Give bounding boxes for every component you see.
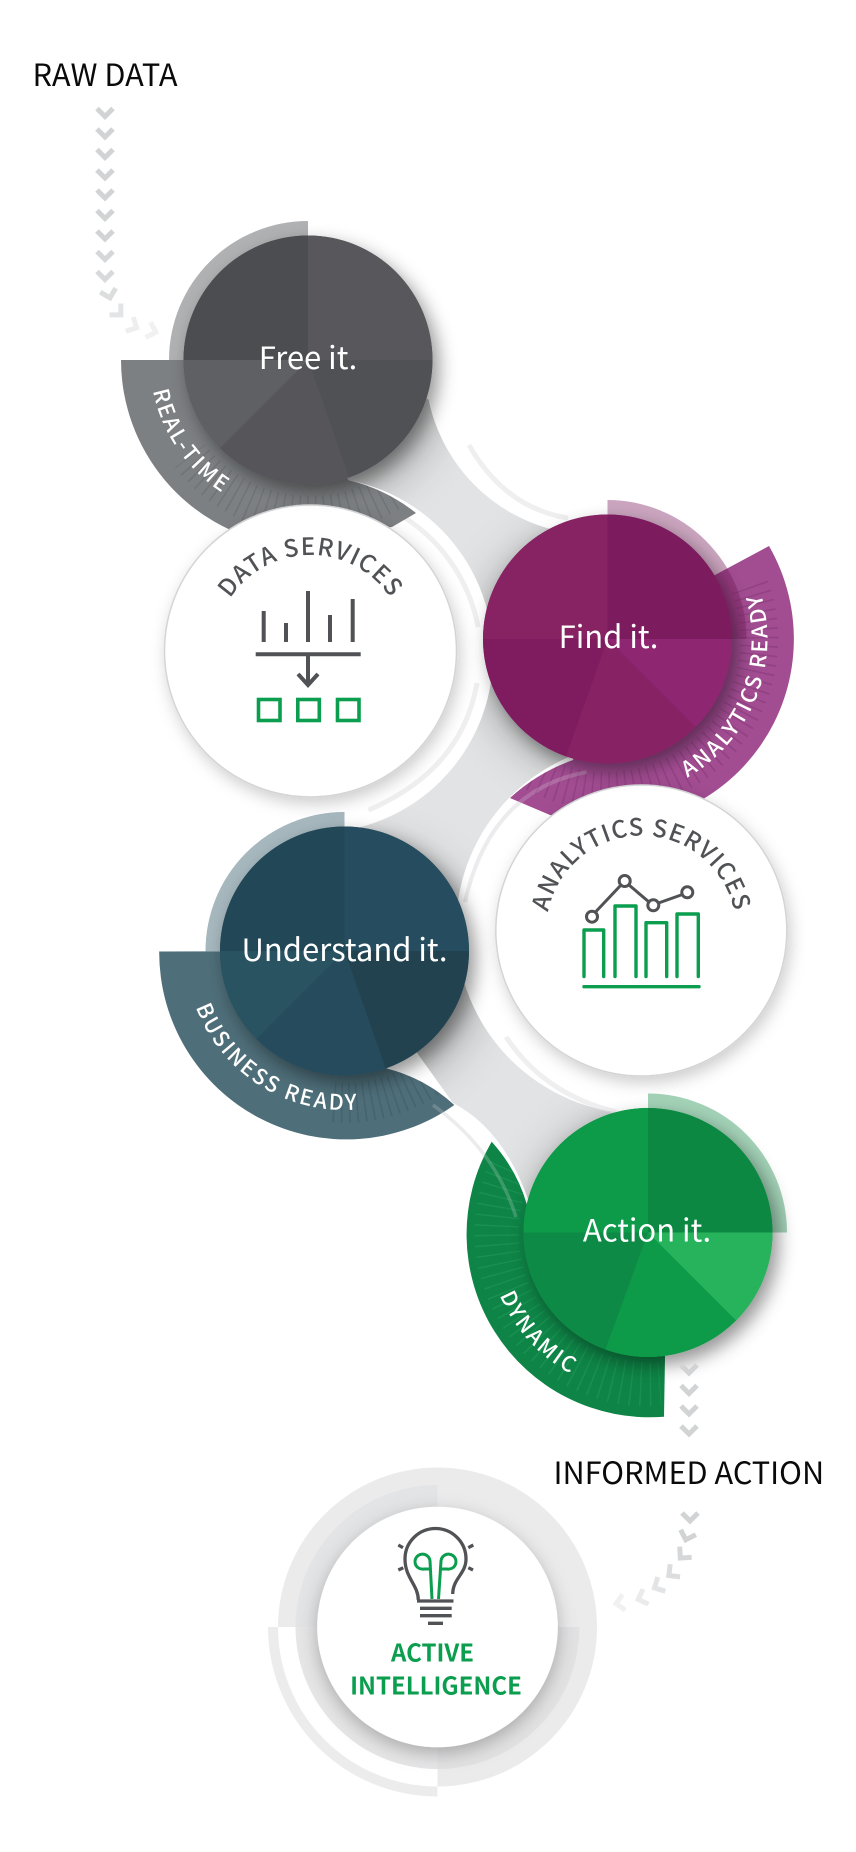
- step circle: Understand it: [220, 826, 469, 1076]
- pale quarter arc: Action it: [648, 1094, 787, 1232]
- step label: Find it: Find it.: [559, 612, 658, 657]
- outer ring: [278, 1467, 597, 1786]
- band: dynamic sector: [467, 1142, 665, 1417]
- label: analytics services: ANALYTICS SERVICES: [532, 818, 750, 912]
- label: active intelligence: [350, 1634, 522, 1701]
- arrow: chevrons below Action it: [681, 1365, 697, 1434]
- band: business ready sector: [159, 951, 454, 1139]
- icon: bar chart with trend line: [584, 876, 699, 987]
- thin outer arc: [273, 1627, 438, 1792]
- step label: Understand it: Understand it.: [242, 925, 447, 970]
- connector: grey S-shaped band linking the four steps: [348, 399, 616, 1199]
- band label: analytics ready: ANALYTICS READY: [683, 598, 768, 778]
- icon: bars filtered down to squares: [256, 591, 361, 720]
- step label: Action it: Action it.: [583, 1206, 711, 1250]
- white centre disc: [317, 1507, 558, 1747]
- heading: raw data: RAW DATA: [32, 50, 178, 95]
- step label: Free it: Free it.: [259, 333, 357, 378]
- step circle: Action it: [524, 1108, 772, 1357]
- pale quarter arc: Free it: [169, 221, 308, 360]
- white circle: data services: [160, 504, 468, 811]
- faint accent arcs over the purple and green sectors: [433, 772, 587, 1217]
- white circle: analytics services: [490, 784, 798, 1090]
- pale quarter arc: Understand it: [205, 812, 344, 952]
- thin accent arcs along the connector: [368, 445, 617, 1217]
- arrow: chevrons from informed action to active intelligence: [615, 1513, 698, 1612]
- band label: business ready: BUSINESS READY: [196, 1002, 356, 1110]
- label: active intelligence: ACTIVE: [390, 1634, 474, 1669]
- label: active intelligence: INTELLIGENCE: [350, 1666, 522, 1701]
- step circle: Find it: [483, 514, 732, 764]
- panel: active intelligence rings: [273, 1467, 597, 1792]
- band: analytics ready sector: [510, 546, 794, 826]
- band label: dynamic: DYNAMIC: [500, 1290, 576, 1372]
- arrow: chevrons from raw data to Free it: [97, 108, 158, 340]
- label: data services: DATA SERVICES: [217, 537, 402, 596]
- band: real-time sector: [121, 360, 416, 544]
- step circle: Free it: [184, 236, 432, 484]
- pale quarter arc: Find it: [608, 500, 746, 639]
- inner ring: [296, 1485, 580, 1769]
- band label: real-time: REAL-TIME: [153, 389, 230, 492]
- heading: informed action: INFORMED ACTION: [554, 1448, 824, 1493]
- icon: light bulb: [398, 1528, 473, 1623]
